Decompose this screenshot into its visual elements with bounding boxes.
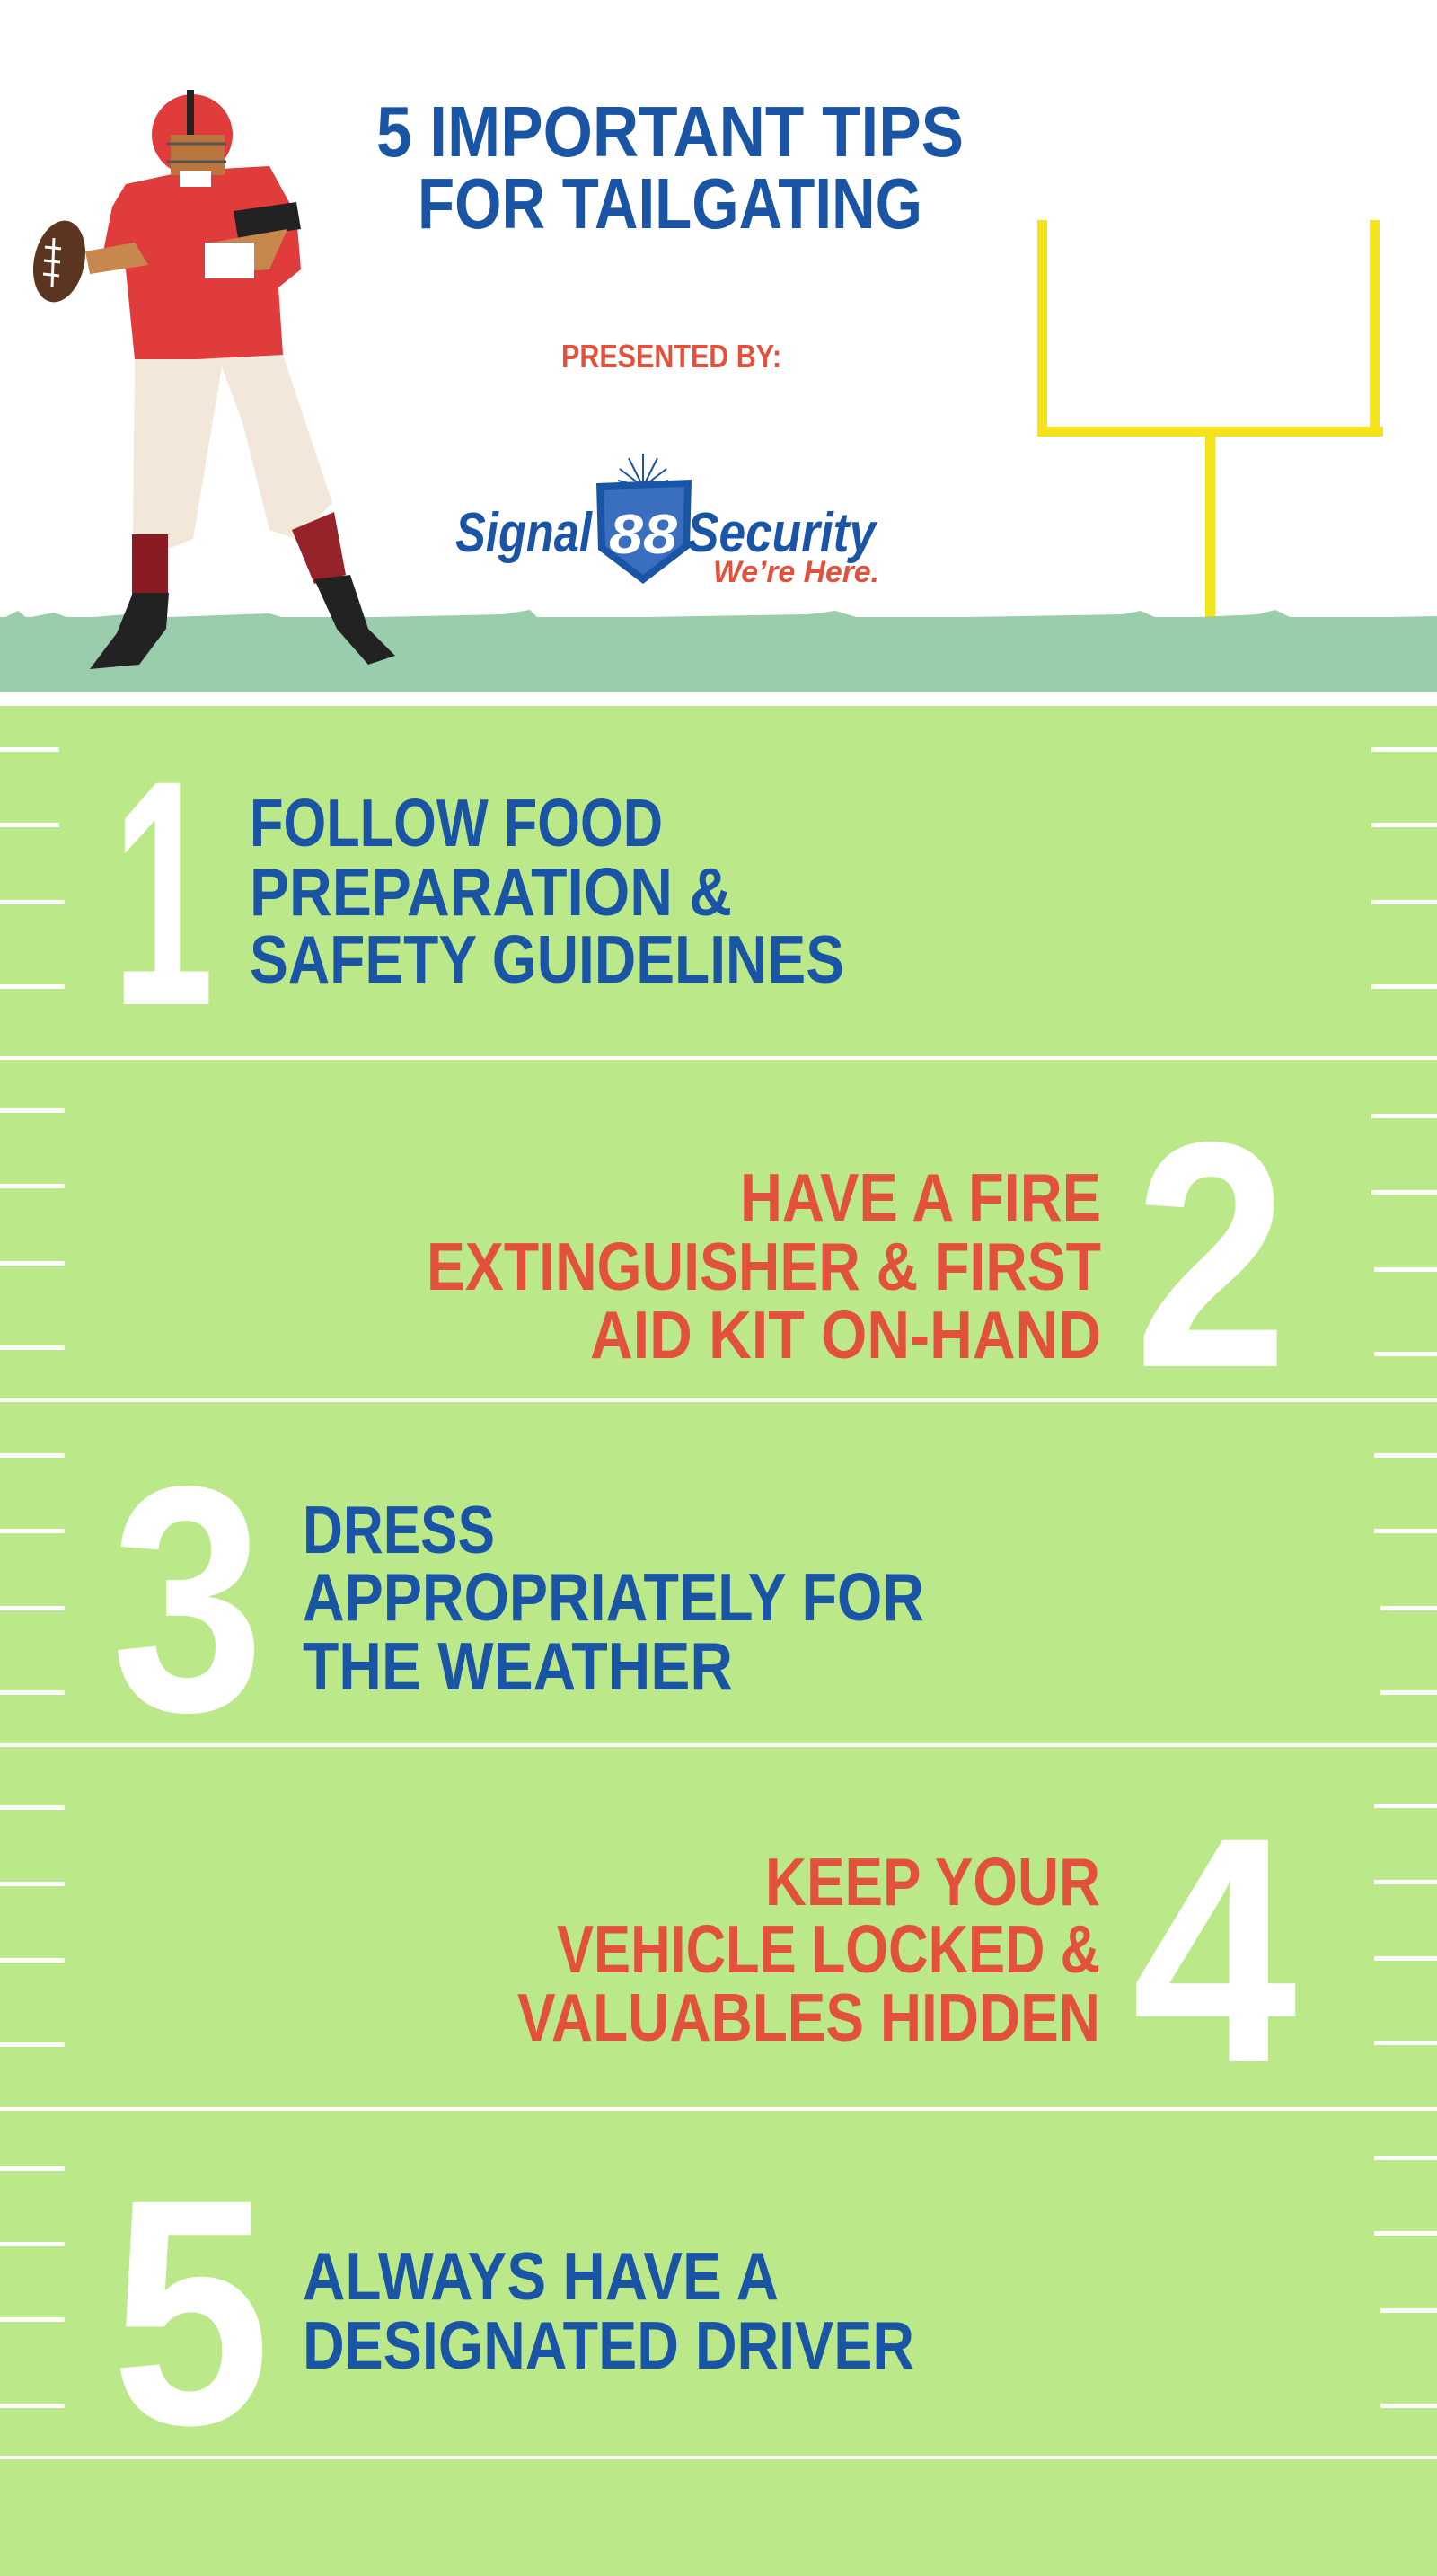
tip 4 text [517, 1844, 1100, 2055]
number 1: 1 [112, 713, 214, 1072]
logo: Signal 88 Security: Security [687, 502, 878, 564]
helmet [152, 94, 233, 175]
tip 1 text: FOLLOW FOOD [250, 785, 663, 860]
field background [0, 706, 1437, 2576]
jersey [103, 166, 301, 359]
logo: Signal 88 Security: We’re Here. [713, 555, 879, 589]
number 2: 2 [1134, 1075, 1288, 1434]
logo: Signal 88 Security: Signal [455, 502, 593, 564]
number 4: 4 [1132, 1770, 1299, 2130]
tip 3 text: APPROPRIATELY FOR [303, 1559, 924, 1635]
number 3: 3 [111, 1419, 264, 1778]
logo: Signal 88 Security [455, 454, 879, 589]
tip 1 text: PREPARATION & [250, 854, 732, 930]
title: 5 IMPORTANT TIPS [376, 92, 964, 172]
tip 3 text: DRESS [303, 1492, 495, 1567]
player illustration [26, 90, 395, 669]
tip 2 [427, 1075, 1288, 1434]
tip 3 text: THE WEATHER [303, 1628, 733, 1704]
tip 5 text [303, 2238, 914, 2383]
dividers [0, 1056, 1437, 2459]
white line under grass [0, 692, 1437, 704]
legs [133, 350, 225, 548]
tip 4 text: KEEP YOUR [765, 1844, 1100, 1919]
tip 4 text: VEHICLE LOCKED & [557, 1911, 1100, 1987]
title: FOR TAILGATING [418, 163, 922, 243]
goalpost [1037, 220, 1383, 641]
arms [85, 243, 148, 274]
tip 5 text: ALWAYS HAVE A [303, 2238, 779, 2314]
tip 3 [111, 1419, 924, 1778]
tip 2 text: EXTINGUISHER & FIRST [427, 1229, 1101, 1304]
tip 5 [111, 2132, 914, 2492]
tip 1 text: SAFETY GUIDELINES [250, 922, 844, 997]
tip 4 text: VALUABLES HIDDEN [517, 1980, 1100, 2055]
tip 5 text: DESIGNATED DRIVER [303, 2307, 914, 2383]
tip 1 [112, 713, 844, 1072]
logo: Signal 88 Security: 88 [609, 504, 678, 566]
tip 2 text: HAVE A FIRE [740, 1160, 1101, 1235]
yard ticks [0, 747, 1437, 2408]
tip 2 text: AID KIT ON-HAND [590, 1297, 1101, 1372]
tip 2 text [427, 1160, 1101, 1372]
number 5: 5 [111, 2132, 270, 2492]
ball [26, 216, 93, 307]
title [376, 92, 964, 243]
tip 1 text [250, 785, 844, 997]
presented by: PRESENTED BY: [561, 338, 781, 375]
tip 4 [517, 1770, 1299, 2130]
starburst [618, 454, 668, 487]
tip 3 text [303, 1492, 924, 1704]
grass band [0, 610, 1437, 692]
